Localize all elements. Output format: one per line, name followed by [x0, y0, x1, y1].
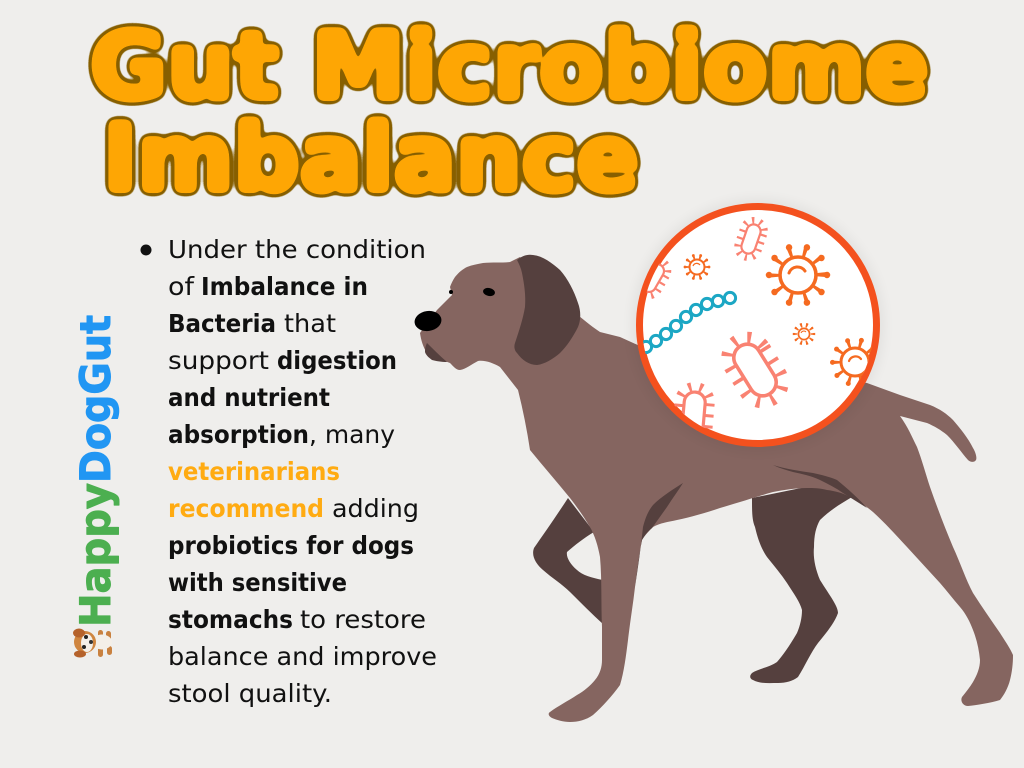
lens — [640, 206, 876, 444]
brand: HappyDogGut vertical logo — [71, 315, 120, 627]
text block: bullet paragraph — [140, 235, 437, 708]
icon: puppy mascot — [73, 628, 112, 658]
magnifier circle: gut microbes — [634, 206, 878, 458]
far front leg — [533, 498, 603, 624]
text block: bullet paragraph: that — [284, 309, 336, 338]
text block: bullet paragraph: and nutrient — [168, 383, 330, 412]
left bacterium — [646, 260, 672, 299]
illustration: brown dog — [413, 255, 1013, 722]
bullet marker — [140, 244, 152, 256]
text block: bullet paragraph: support — [168, 346, 269, 375]
brand: HappyDogGut vertical logo: DogGut — [71, 315, 120, 483]
large bacterium — [720, 331, 790, 409]
text block: bullet paragraph: veterinarians — [168, 457, 340, 486]
text block: bullet paragraph: recommend — [168, 494, 324, 523]
text block: bullet paragraph: stool quality. — [168, 679, 332, 708]
title: Imbalance — [103, 104, 639, 212]
title — [90, 12, 929, 212]
small virus — [685, 255, 709, 279]
text block: bullet paragraph: Under the condition — [168, 235, 426, 264]
ear — [514, 255, 580, 365]
text block: bullet paragraph: Imbalance in — [201, 272, 368, 301]
text block: bullet paragraph: to restore — [300, 605, 426, 634]
text block: bullet paragraph: with sensitive — [168, 568, 347, 597]
far rear leg — [750, 480, 852, 683]
text block: bullet paragraph: digestion — [277, 346, 397, 375]
text block: bullet paragraph: , many — [309, 420, 395, 449]
text block: bullet paragraph: Bacteria — [168, 309, 276, 338]
text block: bullet paragraph: of — [168, 272, 195, 301]
bacteria chain — [640, 292, 736, 353]
right virus — [832, 340, 878, 384]
far eye — [449, 290, 453, 294]
brand: HappyDogGut vertical logo: Happy — [71, 483, 120, 627]
top bacterium — [735, 218, 767, 260]
text block: bullet paragraph: absorption — [168, 420, 309, 449]
chest fold — [635, 483, 683, 587]
mouth shadow — [425, 343, 447, 362]
text block: bullet paragraph: balance and improve — [168, 642, 437, 671]
bottom bacterium — [674, 382, 715, 429]
text block: bullet paragraph: adding — [332, 494, 419, 523]
text block: bullet paragraph: probiotics for dogs — [168, 531, 414, 560]
eye — [482, 287, 496, 297]
text block: bullet paragraph: stomachs — [168, 605, 293, 634]
circle shadow — [632, 199, 884, 451]
large virus — [769, 246, 827, 304]
tiny virus — [794, 324, 814, 344]
dog body — [420, 257, 1013, 722]
nose — [413, 309, 443, 333]
haunch fold — [773, 465, 867, 508]
title: Gut Microbiome — [90, 12, 929, 120]
